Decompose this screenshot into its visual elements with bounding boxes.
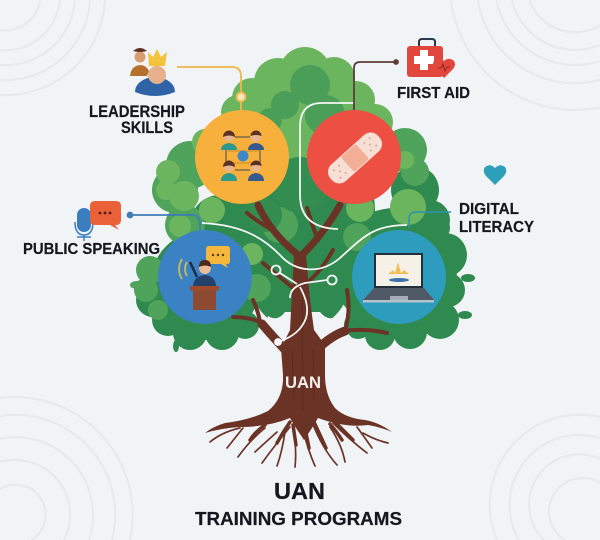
badge: public speaking bbox=[158, 230, 252, 324]
speech bubble bbox=[206, 246, 230, 268]
podium bbox=[190, 286, 219, 290]
icon: leaders with crown bbox=[130, 48, 175, 96]
speaker bbox=[193, 275, 216, 287]
label: digital literacy: DIGITAL bbox=[459, 201, 519, 218]
connector: first aid bbox=[354, 60, 398, 112]
title bbox=[195, 478, 402, 529]
badge: first aid bandage bbox=[307, 110, 401, 204]
white connector lines bbox=[202, 103, 407, 345]
badge: leadership skills bbox=[195, 110, 289, 204]
icon: first aid kit bbox=[407, 39, 455, 78]
label: public speaking: PUBLIC SPEAKING bbox=[23, 241, 160, 258]
title: UAN bbox=[274, 478, 325, 504]
connector: public speaking bbox=[128, 212, 200, 232]
label: digital literacy bbox=[459, 201, 534, 236]
tree trunk, branches and roots bbox=[205, 205, 392, 467]
trunk label: UAN bbox=[285, 374, 321, 392]
icon: heart bbox=[484, 165, 506, 185]
title: TRAINING PROGRAMS bbox=[195, 508, 402, 529]
connector: leadership bbox=[177, 67, 246, 110]
label: leadership skills: SKILLS bbox=[121, 119, 173, 137]
label: digital literacy: LITERACY bbox=[459, 219, 534, 236]
label: leadership skills bbox=[89, 103, 185, 137]
icon: microphone and chat bubble bbox=[75, 201, 121, 241]
label: leadership skills: LEADERSHIP bbox=[89, 103, 185, 121]
badge: digital literacy laptop bbox=[352, 230, 446, 324]
connector: digital literacy bbox=[409, 212, 451, 228]
tree canopy bbox=[130, 47, 475, 352]
canopy gaps around trunk bbox=[250, 312, 355, 360]
label: first aid: FIRST AID bbox=[397, 85, 470, 102]
